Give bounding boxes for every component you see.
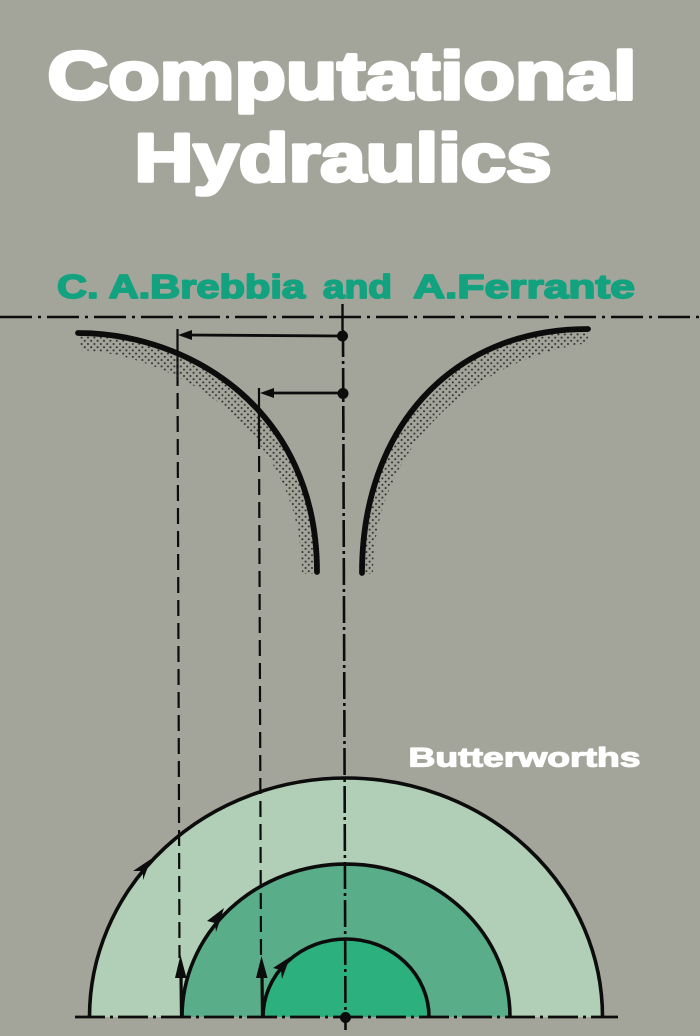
left curve: [78, 333, 317, 572]
arc arrowhead: outer: [133, 859, 151, 880]
arc arrowhead: inner: [273, 957, 290, 979]
vertical arrow: outer: [175, 955, 186, 1017]
title: [48, 38, 636, 196]
middle zone: [182, 864, 510, 1017]
outer zone: [90, 778, 602, 1017]
top horizontal axis: [0, 316, 700, 318]
chart: concentric semicircles: [90, 778, 602, 1017]
horizontal arrow: upper: [178, 330, 348, 342]
horizontal arrow: lower: [260, 388, 348, 399]
arc arrowhead: middle: [207, 908, 224, 932]
authors: A.Ferrante: [413, 268, 635, 305]
title: Computational: [48, 38, 636, 114]
right curve: [362, 329, 588, 573]
title: Hydraulics: [134, 120, 552, 196]
right stippled shading: [362, 329, 588, 574]
authors: C. A.Brebbia: [57, 268, 306, 305]
left stippled shading: [78, 334, 317, 574]
authors: [57, 268, 635, 305]
inner zone: [263, 939, 429, 1017]
dashed projection lines: [178, 329, 261, 958]
vertical arrow: inner: [256, 956, 268, 1017]
central vertical axis: [342, 304, 346, 1030]
authors: and: [323, 268, 392, 305]
bottom horizontal axis: [75, 1016, 618, 1018]
centre point: [340, 1012, 351, 1023]
publisher: Butterworths: [408, 742, 640, 772]
